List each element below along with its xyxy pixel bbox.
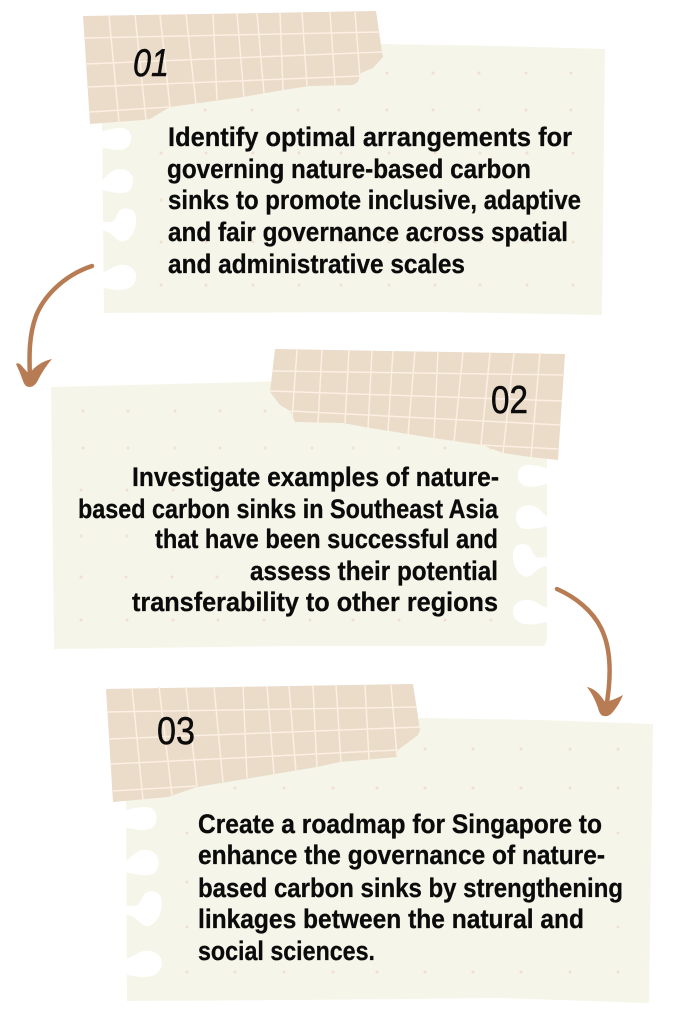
text block 2: Investigate examples of nature-	[132, 462, 499, 492]
text block 3: enhance the governance of nature-	[198, 840, 605, 870]
step number 02: 02	[491, 379, 528, 422]
arrow: step 2 to step 3	[557, 589, 623, 716]
binder holes 3	[124, 807, 162, 977]
text block 1: governing nature-based carbon	[167, 154, 531, 184]
text block 1: and administrative scales	[168, 249, 465, 279]
text block 1: and fair governance across spatial	[168, 217, 568, 247]
paper sheet 3	[126, 718, 653, 1003]
text block 2: that have been successful and	[155, 524, 498, 554]
text block 2	[78, 462, 499, 617]
binder holes 1	[101, 128, 136, 290]
grid tape 1	[83, 11, 383, 124]
text block 3	[198, 809, 623, 966]
panel: step 3 note	[106, 684, 653, 1003]
text block 3: Create a roadmap for Singapore to	[198, 809, 602, 839]
text block 3: social sciences.	[198, 936, 375, 966]
panel: step 2 note	[51, 349, 565, 649]
grid tape 2	[270, 349, 565, 460]
text block 2: based carbon sinks in Southeast Asia	[78, 494, 498, 524]
binder holes 2	[513, 465, 548, 625]
paper sheet 2	[51, 381, 547, 649]
text block 2: assess their potential	[250, 556, 498, 586]
step number 01: 01	[133, 42, 169, 85]
text block 3: based carbon sinks by strengthening	[198, 873, 623, 903]
text block 1: Identify optimal arrangements for	[168, 122, 572, 152]
step number 03: 03	[157, 710, 195, 753]
text block 3: linkages between the natural and	[198, 904, 584, 934]
text block 2: transferability to other regions	[132, 587, 498, 617]
text block 1	[167, 122, 581, 279]
paper sheet 1	[102, 44, 605, 315]
text block 1: sinks to promote inclusive, adaptive	[168, 185, 581, 215]
arrow: step 1 to step 2	[16, 266, 92, 387]
panel: step 1 note	[83, 11, 605, 315]
grid tape 3	[106, 684, 420, 802]
